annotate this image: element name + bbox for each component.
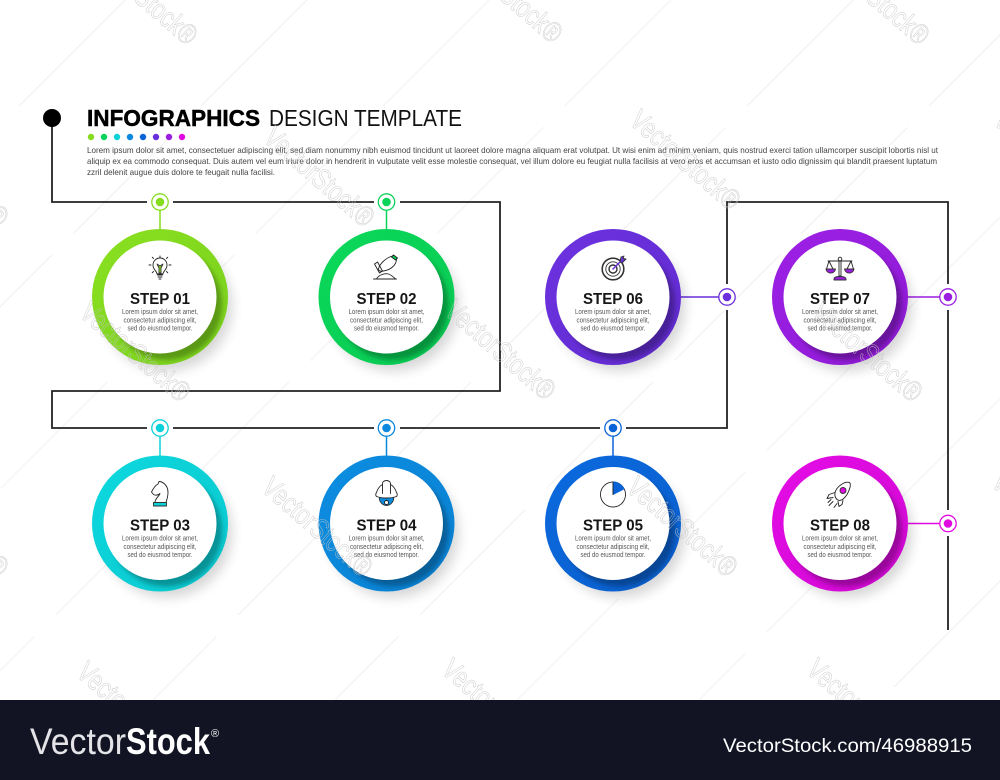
panel: step 02 — [318, 194, 458, 371]
connector node 02 — [378, 194, 395, 232]
footer logo: ® — [211, 728, 219, 740]
step 06 text — [575, 291, 651, 332]
step 06 text: consectetur adipiscing elit, — [576, 318, 650, 324]
footer logo: Vector — [30, 721, 126, 762]
step 08 text: Lorem ipsum dolor sit amet, — [802, 536, 878, 542]
step 02 text: consectetur adipiscing elit, — [350, 318, 423, 324]
intro paragraph: aliquip ex ea commodo consequat. Duis autem vel eum iriure dolor in hendrerit in vulputate velit esse molestie consequat, vel illum dolore eu feugiat nulla facilisis at vero eros et accumsan et iusto odio dignissim qui blandit praesent luptatum — [87, 156, 937, 166]
connector node 01 — [152, 194, 168, 232]
step 04 text — [348, 518, 425, 559]
step 02 text — [348, 291, 425, 332]
title: INFOGRAPHICS — [87, 105, 260, 131]
ring 07 — [772, 229, 912, 371]
step 03 text — [122, 518, 198, 559]
step 02 text: Lorem ipsum dolor sit amet, — [348, 309, 425, 316]
watermarks: VectorStock® — [255, 471, 378, 584]
intro paragraph — [87, 145, 939, 177]
step 06 text: STEP 06 — [583, 291, 643, 308]
icon: target with dart — [602, 256, 626, 280]
step 07 text — [802, 291, 878, 332]
icon: chess knight — [152, 482, 168, 506]
step 04 text: consectetur adipiscing elit, — [350, 544, 423, 551]
step 03 text: sed do eiusmod tempor. — [128, 552, 193, 559]
step 01 text: sed do eiusmod tempor. — [128, 326, 193, 332]
watermarks: VectorStock® — [438, 294, 561, 407]
footer logo — [30, 721, 219, 762]
step 05 text: STEP 05 — [583, 518, 643, 534]
icon: scales — [826, 257, 854, 280]
step 08 text: consectetur adipiscing elit, — [804, 544, 877, 551]
panel: step 03 — [92, 420, 232, 598]
icon: microscope — [374, 255, 398, 279]
step 05 text: Lorem ipsum dolor sit amet, — [575, 536, 651, 542]
step 02 text: STEP 02 — [356, 291, 416, 308]
step 03 text: consectetur adipiscing elit, — [124, 544, 197, 551]
ring 08 — [772, 456, 912, 598]
colour dots — [88, 134, 185, 140]
title: DESIGN TEMPLATE — [269, 105, 462, 131]
step 01 text: STEP 01 — [130, 291, 190, 308]
step 08 text: STEP 08 — [810, 518, 870, 534]
step 04 text: STEP 04 — [356, 518, 417, 534]
footer logo: Stock — [126, 721, 210, 762]
intro paragraph: zzril delenit augue duis dolore te feugait nulla facilisi. — [87, 167, 275, 177]
ring 01 — [92, 229, 232, 371]
icon: helmet and gear — [376, 480, 397, 506]
watermarks: VectorStock® — [620, 471, 743, 584]
icon: light bulb — [149, 256, 171, 279]
connector node 04 — [378, 420, 395, 459]
step 05 text: sed do eiusmod tempor. — [580, 552, 646, 559]
ring 03 — [92, 456, 232, 598]
icon: pie clock — [600, 482, 626, 507]
step 07 text: consectetur adipiscing elit, — [804, 318, 877, 324]
step 01 text — [122, 291, 198, 332]
watermarks: VectorStock® — [257, 121, 380, 234]
footer bar — [0, 700, 1000, 780]
ring 04 — [318, 456, 458, 598]
step 05 text — [575, 518, 651, 559]
watermarks: VectorStock® — [805, 296, 928, 409]
step 07 text: sed do eiusmod tempor. — [808, 326, 873, 332]
step 01 text: consectetur adipiscing elit, — [124, 318, 197, 324]
intro paragraph: Lorem ipsum dolor sit amet, consectetuer adipiscing elit, sed diam nonummy nibh euismod tincidunt ut laoreet dolore magna aliquam erat volutpat. Ut wisi enim ad minim veniam, quis nostrud exerci tation ullamcorper suscipit lobortis nisl ut — [87, 145, 939, 155]
step 08 text — [802, 518, 878, 559]
ring 06 — [545, 229, 685, 371]
panel: step 01 — [92, 194, 232, 371]
step 06 text: Lorem ipsum dolor sit amet, — [575, 309, 651, 316]
connector timeline — [52, 118, 948, 630]
connector node 08 — [905, 515, 956, 532]
ring 05 — [545, 456, 685, 598]
step 05 text: consectetur adipiscing elit, — [576, 544, 650, 551]
watermarks: VectorStock® — [623, 104, 746, 217]
step 02 text: sed do eiusmod tempor. — [354, 326, 419, 332]
connector node 07 — [905, 289, 956, 305]
footer url: VectorStock.com/46988915 — [723, 736, 972, 757]
connector node 03 — [152, 420, 168, 459]
step 07 text: STEP 07 — [810, 291, 870, 308]
step 08 text: sed do eiusmod tempor. — [808, 552, 873, 559]
step 04 text: Lorem ipsum dolor sit amet, — [348, 536, 425, 542]
connector node 06 — [678, 289, 735, 305]
panel: step 04 — [318, 420, 458, 598]
connector node 05 — [605, 420, 621, 459]
step 03 text: STEP 03 — [130, 518, 190, 534]
step 06 text: sed do eiusmod tempor. — [580, 326, 646, 332]
step 04 text: sed do eiusmod tempor. — [354, 552, 419, 559]
watermarks: VectorStock® — [73, 296, 196, 409]
panel: step 05 — [545, 420, 685, 598]
icon: rocket — [827, 482, 850, 508]
panel: step 06 — [545, 229, 735, 371]
step 03 text: Lorem ipsum dolor sit amet, — [122, 536, 198, 542]
step 01 text: Lorem ipsum dolor sit amet, — [122, 309, 198, 316]
step 07 text: Lorem ipsum dolor sit amet, — [802, 309, 878, 316]
start dot — [43, 109, 61, 127]
panel: step 08 — [772, 456, 956, 598]
title — [87, 105, 462, 131]
ring 02 — [318, 229, 458, 371]
panel: step 07 — [772, 229, 956, 371]
